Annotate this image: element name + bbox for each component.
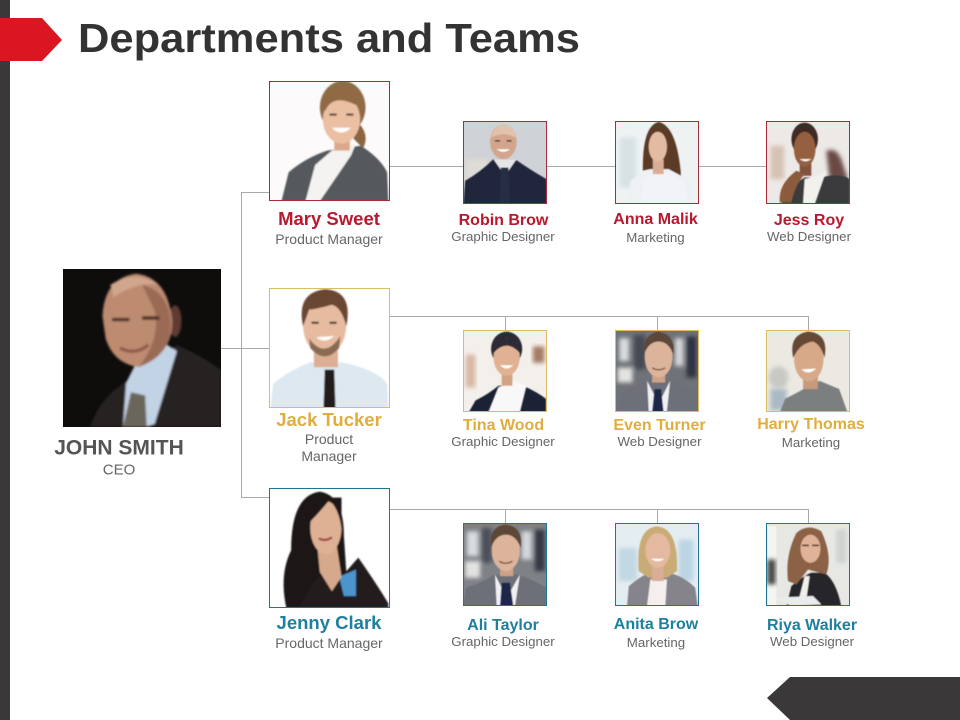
frame: Jack Tucker xyxy=(270,288,390,408)
portrait: Anna Malik xyxy=(616,121,698,204)
portrait: Jess Roy xyxy=(766,121,850,204)
red arrow tab xyxy=(0,18,62,61)
portrait: Jack Tucker xyxy=(270,288,390,408)
name: Jenny Clark: Jenny Clark xyxy=(277,612,382,633)
portrait: John Smith xyxy=(63,269,221,427)
name: Anita Brow: Anita Brow xyxy=(614,616,699,633)
role: Jess Roy: Web Designer xyxy=(767,229,852,244)
frame: Anna Malik xyxy=(616,122,698,204)
name: Mary Sweet: Mary Sweet xyxy=(278,208,380,229)
name: Harry Thomas: Harry Thomas xyxy=(757,416,865,433)
frame: Ali Taylor xyxy=(464,524,546,606)
role: Jack Tucker: Product xyxy=(305,431,353,447)
role: Robin Brow: Graphic Designer xyxy=(451,229,555,244)
role: Anita Brow: Marketing xyxy=(627,635,685,650)
name: John Smith: JOHN SMITH xyxy=(54,436,184,460)
frame: Jess Roy xyxy=(766,122,850,204)
role: CEO: CEO xyxy=(103,462,135,478)
portrait: Robin Brow xyxy=(464,121,546,204)
frame: Mary Sweet xyxy=(270,82,390,200)
portrait: Anita Brow xyxy=(616,523,698,606)
frame: Riya Walker xyxy=(766,524,850,606)
name: Robin Brow: Robin Brow xyxy=(459,212,549,229)
frame: Anita Brow xyxy=(616,524,698,606)
portrait: Tina Wood xyxy=(464,330,546,412)
portrait: Mary Sweet xyxy=(270,81,390,201)
frame: Robin Brow xyxy=(464,122,546,204)
role: Riya Walker: Web Designer xyxy=(770,634,855,649)
name: Anna Malik: Anna Malik xyxy=(613,211,698,228)
role: Harry Thomas: Marketing xyxy=(782,435,840,450)
portrait: Even Turner xyxy=(616,330,698,412)
name: Jess Roy: Jess Roy xyxy=(774,212,844,229)
portrait: Riya Walker xyxy=(766,523,850,606)
role: Tina Wood: Graphic Designer xyxy=(451,434,555,449)
role: Jenny Clark: Product Manager xyxy=(275,635,383,651)
frame: Jenny Clark xyxy=(270,488,390,608)
role: Ali Taylor: Graphic Designer xyxy=(451,634,555,649)
left side bar xyxy=(0,0,10,720)
role: Anna Malik: Marketing xyxy=(626,230,685,245)
portrait: Ali Taylor xyxy=(464,523,546,606)
connector lines xyxy=(221,166,808,523)
role: Even Turner: Web Designer xyxy=(617,434,702,449)
name: Riya Walker: Riya Walker xyxy=(767,617,857,634)
name: Even Turner: Even Turner xyxy=(613,417,706,434)
name: Tina Wood: Tina Wood xyxy=(463,417,544,434)
frame: Harry Thomas xyxy=(766,330,850,412)
frame: Even Turner xyxy=(616,330,698,412)
role line 2: Jack Tucker: Manager xyxy=(301,448,357,464)
name: Ali Taylor: Ali Taylor xyxy=(467,617,539,634)
title: Departments and Teams xyxy=(78,15,580,61)
bottom right tab xyxy=(767,677,960,720)
frame: Tina Wood xyxy=(464,330,546,412)
name: Jack Tucker: Jack Tucker xyxy=(276,409,382,430)
role: Mary Sweet: Product Manager xyxy=(275,231,383,247)
portrait: Jenny Clark xyxy=(270,488,390,608)
portrait: Harry Thomas xyxy=(767,330,849,412)
